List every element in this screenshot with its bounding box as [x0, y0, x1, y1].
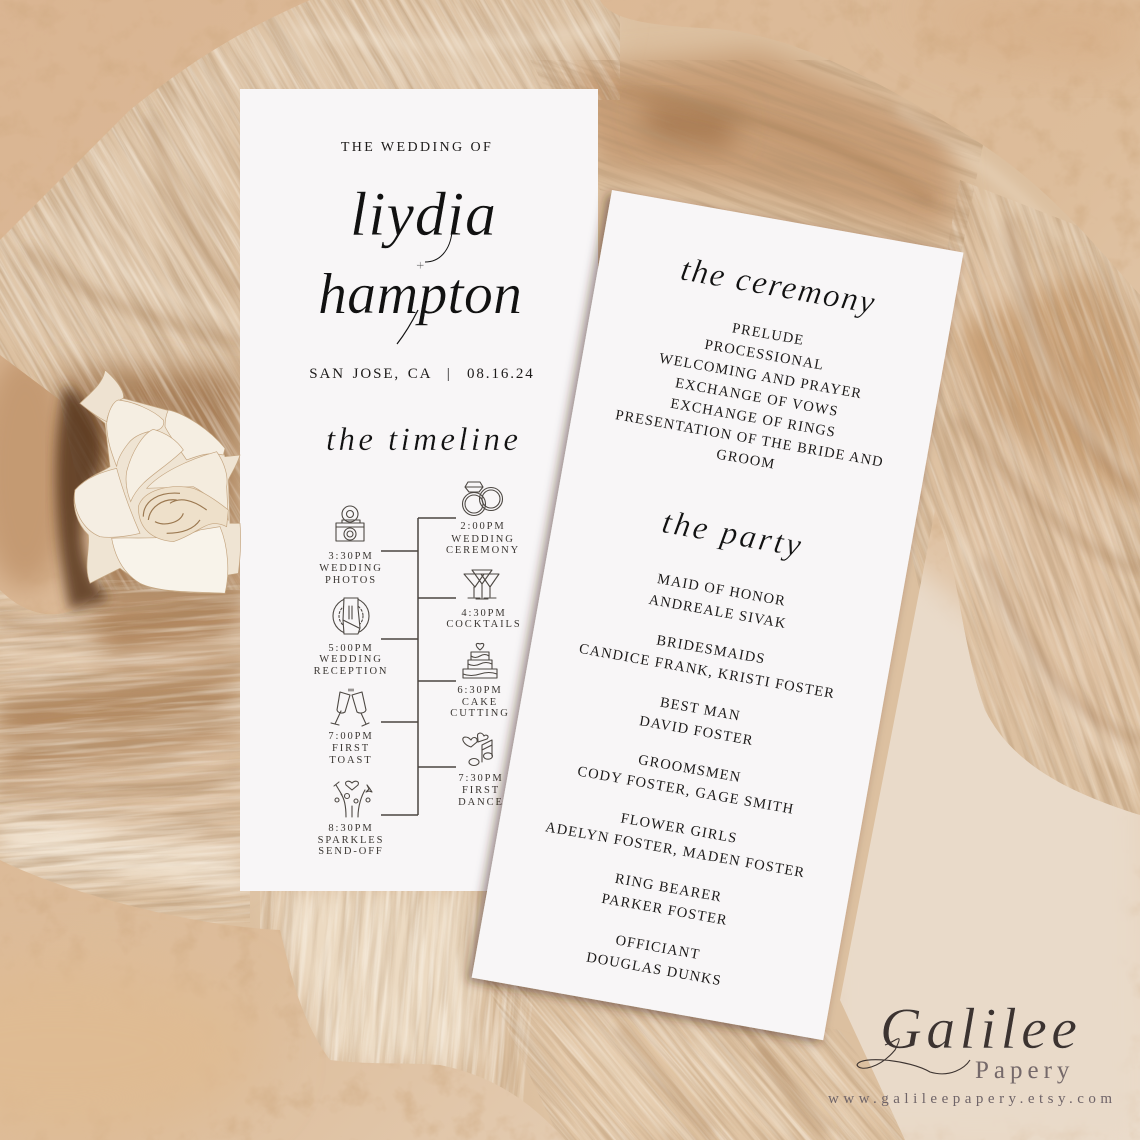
- label: 4:30pm cocktails: [446, 608, 522, 630]
- logo: Galilee Papery: [828, 996, 1117, 1107]
- ceremony order list: PRELUDE: [731, 320, 805, 349]
- label: 5:00pm wedding reception: 5:00PM: [328, 643, 374, 654]
- timeline connector lines: [381, 518, 456, 815]
- dark shadow behind flower: [56, 385, 110, 610]
- label: 8:30pm sparkles send-off: SPARKLES: [318, 835, 384, 846]
- party list: [523, 559, 853, 1000]
- party list: CODY FOSTER, GAGE SMITH: [576, 764, 795, 818]
- ceremony order list: EXCHANGE OF VOWS: [674, 375, 840, 420]
- party list: RING BEARER: [614, 871, 723, 906]
- label: 7:00pm first toast: TOAST: [329, 755, 373, 766]
- website address: www.galileepapery.etsy.com: [828, 1091, 1117, 1107]
- label: 4:30pm cocktails: COCKTAILS: [446, 619, 522, 630]
- label: 2:00pm wedding ceremony: WEDDING: [451, 534, 515, 545]
- ceremony order list: PRESENTATION OF THE BRIDE AND: [614, 407, 885, 471]
- icon: music notes and hearts: [463, 733, 492, 766]
- flower: white gardenia: [74, 370, 241, 593]
- logo script name: Galilee: [880, 996, 1077, 1061]
- party list: OFFICIANT: [614, 932, 701, 963]
- label: 8:30pm sparkles send-off: [318, 823, 384, 857]
- plus sign: +: [415, 258, 425, 274]
- label: 7:00pm first toast: FIRST: [332, 743, 370, 754]
- party list: GROOMSMEN: [637, 752, 742, 786]
- label: 5:00pm wedding reception: WEDDING: [319, 654, 383, 665]
- panel: timeline card: [240, 89, 598, 891]
- icon: sparklers: [334, 781, 372, 817]
- icon: wedding cake: [463, 643, 497, 678]
- couple name: hampton: hampton: [318, 261, 522, 326]
- party list: PARKER FOSTER: [600, 891, 729, 929]
- label: 7:30pm first dance: FIRST: [462, 785, 500, 796]
- flower centre: [138, 487, 228, 542]
- icon: cocktail glasses: [464, 570, 499, 599]
- party list: ADELYN FOSTER, MADEN FOSTER: [544, 819, 806, 881]
- ceremony order list: PROCESSIONAL: [703, 337, 825, 374]
- label: 6:30pm cake cutting: [450, 685, 510, 719]
- ceremony order list: EXCHANGE OF RINGS: [669, 396, 837, 441]
- logo word: Papery: Papery: [975, 1057, 1074, 1084]
- label: 5:00pm wedding reception: RECEPTION: [314, 666, 388, 677]
- icon: plate with cutlery: [333, 598, 369, 634]
- icon: toasting glasses: [331, 689, 369, 726]
- label: 7:30pm first dance: [458, 773, 504, 808]
- label: 7:00pm first toast: 7:00PM: [328, 731, 374, 742]
- label: 3:30pm wedding photos: PHOTOS: [325, 575, 377, 586]
- party list: DOUGLAS DUNKS: [585, 950, 723, 989]
- party list: BRIDESMAIDS: [655, 632, 767, 668]
- heading: the party: the party: [659, 504, 804, 564]
- ceremony order list: GROOM: [715, 447, 776, 473]
- label: 2:00pm wedding ceremony: [446, 521, 520, 556]
- label: 7:30pm first dance: DANCE: [458, 797, 504, 808]
- couple name: lidya: liydia: [350, 181, 496, 249]
- heading: the ceremony: the ceremony: [678, 252, 878, 322]
- ceremony order list: [610, 303, 903, 491]
- party list: BEST MAN: [659, 695, 742, 725]
- label: 3:30pm wedding photos: 3:30PM: [328, 551, 374, 562]
- party list: DAVID FOSTER: [638, 713, 755, 749]
- label: 4:30pm cocktails: 4:30PM: [461, 608, 507, 619]
- label: 6:30pm cake cutting: CAKE: [462, 697, 498, 708]
- label: 2:00pm wedding ceremony: 2:00PM: [460, 521, 506, 532]
- icon: wedding rings: [462, 482, 502, 516]
- party list: MAID OF HONOR: [656, 571, 787, 610]
- label: 2:00pm wedding ceremony: CEREMONY: [446, 545, 520, 556]
- label: 8:30pm sparkles send-off: SEND-OFF: [318, 846, 384, 857]
- label: 7:30pm first dance: 7:30PM: [458, 773, 504, 784]
- label: 7:00pm first toast: [328, 731, 374, 766]
- small heading: the wedding of: THE WEDDING OF: [341, 140, 493, 155]
- label: 3:30pm wedding photos: [319, 551, 383, 586]
- party list: FLOWER GIRLS: [619, 810, 739, 847]
- ceremony order list: WELCOMING AND PRAYER: [658, 351, 863, 402]
- panel: ceremony and party card: [472, 190, 963, 1040]
- icon: camera: [336, 506, 364, 541]
- heading: the timeline: the timeline: [326, 422, 518, 458]
- party list: CANDICE FRANK, KRISTI FOSTER: [578, 641, 836, 702]
- label: 6:30pm cake cutting: CUTTING: [450, 708, 510, 719]
- party list: ANDREALE SIVAK: [648, 592, 788, 632]
- label: 5:00pm wedding reception: [314, 643, 388, 677]
- label: 6:30pm cake cutting: 6:30PM: [457, 685, 503, 696]
- label: 3:30pm wedding photos: WEDDING: [319, 563, 383, 574]
- label: 8:30pm sparkles send-off: 8:30PM: [328, 823, 374, 834]
- place and date: SAN JOSE, CA | 08.16.24: [309, 366, 535, 382]
